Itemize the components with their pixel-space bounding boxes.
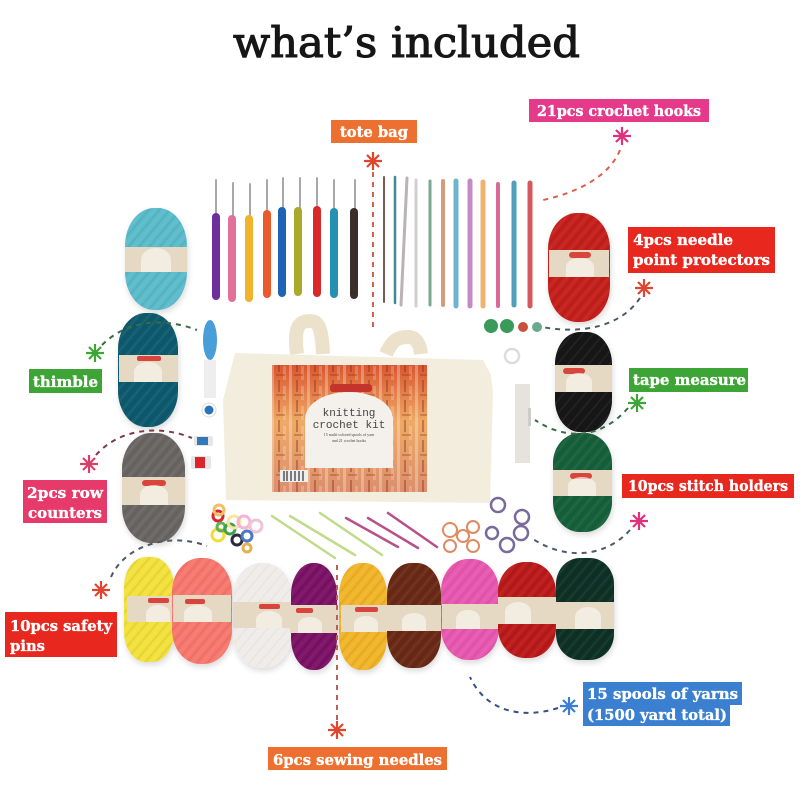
label: tote bag: tote bag — [340, 123, 408, 141]
bag body — [223, 353, 493, 503]
connector: tape measure — [535, 408, 628, 434]
star: stitch holders — [630, 512, 648, 530]
tape measure — [515, 384, 531, 463]
star: row counters — [80, 455, 98, 473]
connector: stitch holders — [533, 530, 630, 553]
label: 4pcs needle point protectors: 4pcs needle — [633, 231, 733, 249]
label text: and 21 crochet hooks — [332, 438, 366, 443]
sewing needles — [272, 513, 437, 558]
label text: knitting — [323, 408, 375, 420]
brand tag — [330, 384, 372, 392]
label: 10pcs stitch holders: 10pcs stitch holders — [628, 477, 788, 495]
safety pins — [212, 505, 262, 552]
connector: needle protectors — [542, 298, 640, 330]
label text — [313, 408, 385, 443]
label: 15 spools of yarns: 15 spools of yarns — [587, 685, 738, 703]
yarn: green — [553, 433, 612, 532]
star: needle protectors — [635, 279, 653, 297]
label: 2pcs row counters — [23, 480, 107, 523]
row counters — [191, 436, 213, 469]
ring — [505, 349, 519, 363]
label: 4pcs needle point protectors: point protectors — [633, 251, 770, 269]
label: 4pcs needle point protectors — [628, 227, 775, 273]
label: thimble: thimble — [33, 373, 98, 391]
connector: thimble — [102, 323, 197, 345]
connector: yarn spools — [470, 677, 558, 713]
yarn: black — [555, 332, 612, 432]
connector: safety pins — [111, 540, 207, 577]
ergonomic crochet hooks — [216, 178, 355, 298]
connector: tote bag — [372, 172, 374, 330]
label: 15 spools of yarns: (1500 yard total) — [587, 706, 727, 724]
star: crochet hooks — [613, 127, 631, 145]
label: tote bag — [331, 120, 417, 143]
label: 6pcs sewing needles: 6pcs sewing needles — [273, 751, 442, 769]
label: 10pcs safety pins: pins — [10, 637, 45, 655]
label: thimble — [29, 369, 102, 393]
label: 10pcs safety pins — [5, 612, 117, 657]
bag front label — [272, 365, 427, 492]
yarn: grey — [122, 433, 185, 543]
star markers — [80, 127, 653, 739]
label: 2pcs row counters: 2pcs row — [27, 484, 104, 502]
yarn: light blue — [125, 208, 187, 310]
star: tote bag — [364, 152, 382, 170]
label white arch — [305, 392, 393, 468]
stitch holders — [443, 498, 529, 552]
label text: crochet kit — [313, 420, 385, 432]
title: what’s included — [233, 18, 580, 67]
barcode — [280, 470, 308, 482]
star: yarn spools — [560, 697, 578, 715]
connector: row counters — [96, 431, 192, 455]
label: tape measure: tape measure — [633, 371, 746, 389]
star: sewing needles — [328, 721, 346, 739]
connector: sewing needles — [336, 560, 338, 720]
label: 21pcs crochet hooks: 21pcs crochet hooks — [537, 102, 701, 120]
star: tape measure — [628, 394, 646, 412]
star: safety pins — [92, 581, 110, 599]
yarn: dark teal — [118, 313, 178, 427]
label: 15 spools of yarns — [583, 682, 742, 726]
bag handles — [296, 321, 421, 354]
label: 10pcs safety pins: 10pcs safety — [10, 617, 113, 635]
bottom row of yarn spools — [124, 557, 614, 670]
scissors — [202, 320, 217, 417]
connector: crochet hooks — [543, 150, 620, 200]
label: 2pcs row counters: counters — [28, 504, 102, 522]
thimbles — [484, 319, 542, 333]
yarn: red right — [548, 213, 610, 322]
label text: 15 multi-colored spools of yarn — [324, 432, 374, 437]
star: thimble — [86, 344, 104, 362]
aluminium crochet hooks — [384, 177, 530, 306]
tote bag — [223, 321, 493, 503]
